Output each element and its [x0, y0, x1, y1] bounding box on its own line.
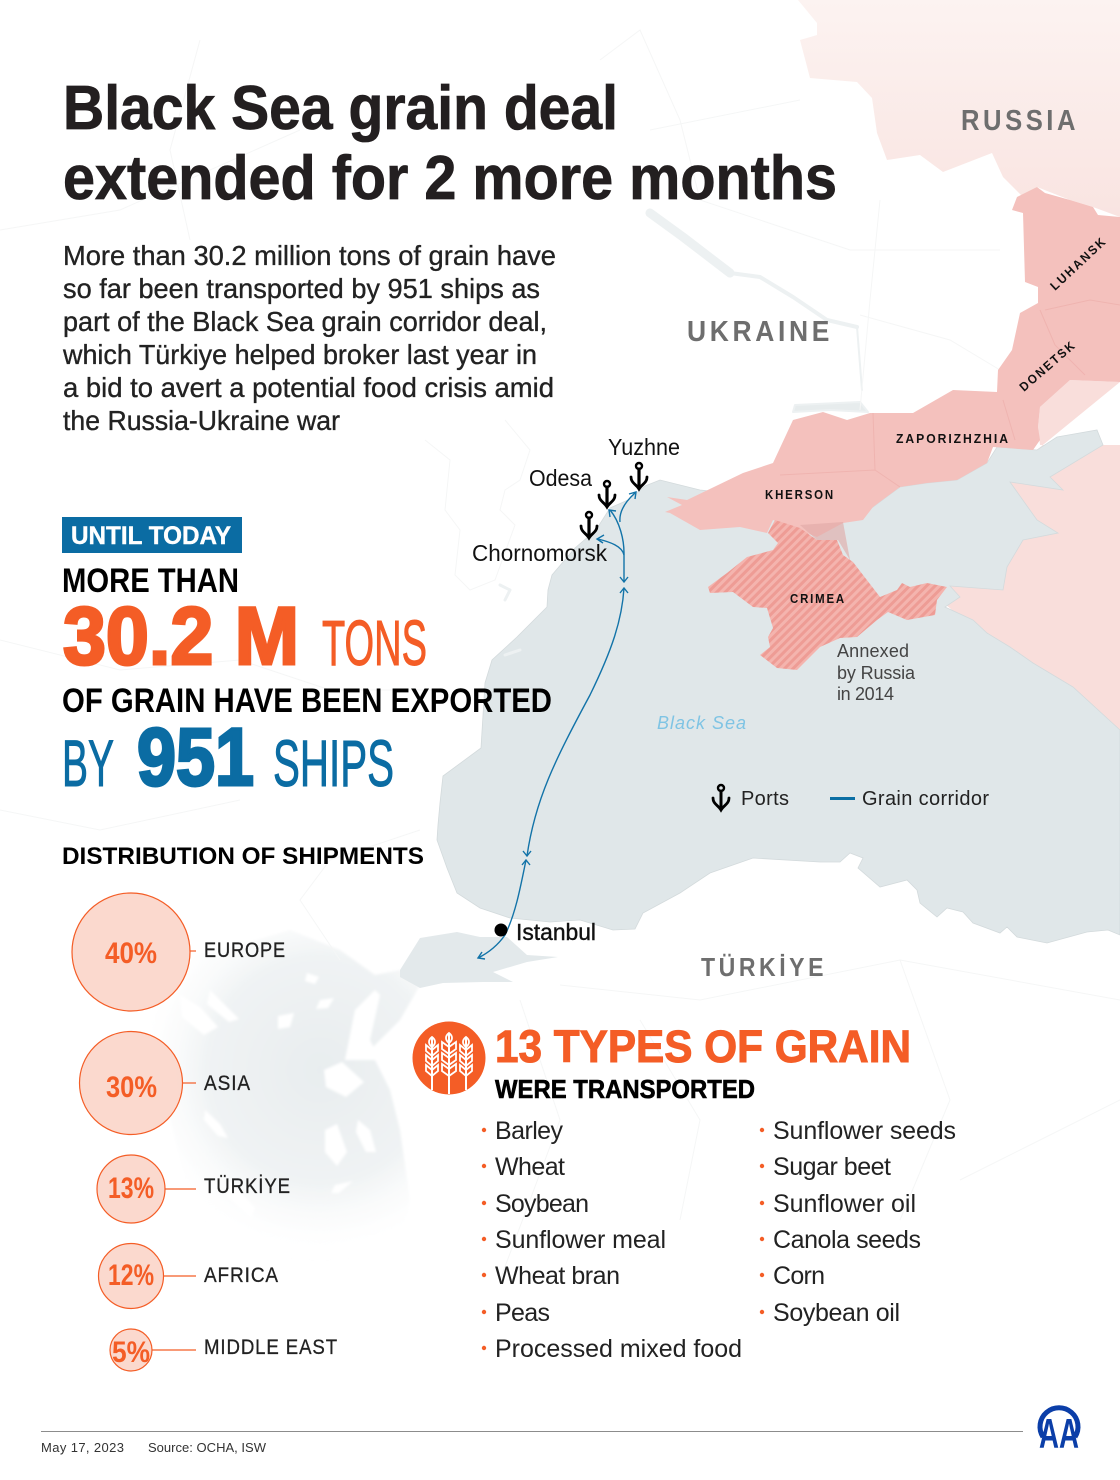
- label: Russia: RUSSIA: [961, 105, 1079, 137]
- until today badge: UNTIL TODAY: [71, 522, 231, 550]
- grain list: column 2: Canola seeds: [773, 1226, 921, 1254]
- stat: tons: OF GRAIN HAVE BEEN EXPORTED: [62, 682, 552, 720]
- occupied region inner border: [780, 300, 1120, 487]
- grain heading: [495, 1021, 911, 1104]
- port labels: Yuzhne: [608, 434, 680, 460]
- intro text: [62, 240, 556, 436]
- footer: Source: OCHA, ISW: [148, 1440, 267, 1455]
- footer: [41, 1431, 1023, 1455]
- region names: AFRICA: [204, 1264, 279, 1287]
- bubble: Türkiye: [97, 1155, 196, 1223]
- title: [63, 74, 837, 213]
- bubble: Africa: [98, 1244, 196, 1308]
- port anchors: [581, 463, 647, 538]
- percentages: 12%: [108, 1259, 154, 1292]
- grain list: column 1: Wheat: [495, 1153, 565, 1181]
- port labels: Chornomorsk: [472, 540, 607, 566]
- occupied regions: [665, 187, 1120, 537]
- stat: tons: [62, 562, 552, 720]
- stat: tons: 30.2 M: [63, 591, 299, 682]
- grain list: column 1: Wheat bran: [495, 1262, 620, 1290]
- stat: ships: BY: [62, 726, 114, 800]
- intro text: which Türkiye helped broker last year in: [62, 339, 537, 370]
- grain list: column 2: Corn: [773, 1262, 825, 1290]
- anchor: Chornomorsk: [581, 512, 597, 538]
- label: Black Sea: Black Sea: [657, 713, 746, 733]
- region labels: ZAPORIZHZHIA: [896, 432, 1010, 446]
- intro text: part of the Black Sea grain corridor deal,: [63, 306, 547, 337]
- grain list: column 2: Soybean oil: [773, 1299, 900, 1327]
- region names: EUROPE: [204, 939, 286, 962]
- label: Ukraine: UKRAINE: [687, 316, 833, 348]
- Black Sea: [437, 430, 1120, 943]
- grain corridor routes: [478, 492, 636, 959]
- Dnipro river: [500, 213, 868, 655]
- stat: ships: [62, 712, 394, 803]
- logo: AA: [1039, 1408, 1079, 1457]
- region names: TÜRKİYE: [204, 1175, 291, 1198]
- grain list: column 1: Sunflower meal: [495, 1226, 666, 1254]
- map legend: Ports: [741, 788, 789, 810]
- intro text: the Russia-Ukraine war: [63, 405, 340, 436]
- icon: wheat: [412, 1022, 486, 1094]
- stat: tons: MORE THAN: [62, 562, 239, 600]
- port labels: Odesa: [529, 465, 592, 491]
- title: Black Sea grain deal: [63, 74, 618, 143]
- Russia (north): [798, 0, 1120, 217]
- Russia (south): [940, 380, 1120, 730]
- region labels: KHERSON: [765, 488, 835, 502]
- Sea of Marmara: [400, 932, 558, 988]
- map legend: [713, 785, 989, 810]
- anchor: Yuzhne: [631, 463, 647, 489]
- stat: ships: 951: [137, 712, 254, 803]
- label: Türkiye: TÜRKİYE: [701, 952, 827, 982]
- bubble: Middle East: [110, 1329, 196, 1371]
- annexed note: in 2014: [837, 684, 894, 704]
- bubble: Europe: [72, 893, 196, 1011]
- grain list: column 1: Peas: [495, 1299, 550, 1327]
- percentages: 30%: [106, 1071, 157, 1104]
- annexed note: Annexed: [837, 641, 909, 661]
- intro text: More than 30.2 million tons of grain have: [63, 240, 556, 271]
- grain list: column 1: Processed mixed food: [495, 1335, 742, 1363]
- region names: ASIA: [204, 1072, 251, 1095]
- anchor: Odesa: [599, 481, 615, 507]
- grain list: column 2: Sugar beet: [773, 1153, 891, 1181]
- stat: tons: TONS: [322, 607, 427, 679]
- region names: [204, 939, 338, 1359]
- region labels: DONETSK: [1017, 338, 1079, 394]
- percentages: 13%: [108, 1172, 154, 1205]
- distribution chart: [72, 893, 338, 1371]
- grain list: column 2: [760, 1117, 956, 1327]
- region labels: LUHANSK: [1047, 234, 1110, 293]
- isthmus: [800, 522, 850, 560]
- region names: MIDDLE EAST: [204, 1336, 338, 1359]
- grain list: column 2: Sunflower oil: [773, 1190, 916, 1218]
- grain list: column 1: Soybean: [495, 1190, 589, 1218]
- annexed note: by Russia: [837, 663, 916, 683]
- region labels: CRIMEA: [790, 592, 846, 606]
- Aegean sea: [130, 930, 420, 1290]
- annexed note: [837, 641, 916, 704]
- percentages: [105, 937, 157, 1369]
- grain list: column 2: Sunflower seeds: [773, 1117, 956, 1145]
- map legend: Grain corridor: [862, 788, 989, 810]
- country labels: [687, 105, 1079, 982]
- title: extended for 2 more months: [63, 144, 837, 213]
- stat: ships: SHIPS: [273, 726, 394, 800]
- grain list: column 1: [482, 1117, 742, 1363]
- percentages: 5%: [112, 1336, 150, 1369]
- Crimea: [708, 520, 947, 670]
- intro text: a bid to avert a potential food crisis amid: [63, 372, 554, 403]
- logo: AA: AA: [1039, 1410, 1079, 1457]
- Istanbul marker: Istanbul: [516, 919, 596, 945]
- grain heading: WERE TRANSPORTED: [495, 1074, 755, 1104]
- port labels: [472, 434, 680, 566]
- footer: May 17, 2023: [41, 1440, 124, 1455]
- grain heading: 13 TYPES OF GRAIN: [495, 1021, 911, 1072]
- distribution heading: DISTRIBUTION OF SHIPMENTS: [62, 843, 424, 870]
- grain list: column 1: Barley: [495, 1117, 564, 1145]
- bubble: Asia: [80, 1032, 196, 1134]
- intro text: so far been transported by 951 ships as: [63, 273, 540, 304]
- region labels: [765, 234, 1110, 606]
- percentages: 40%: [105, 937, 157, 970]
